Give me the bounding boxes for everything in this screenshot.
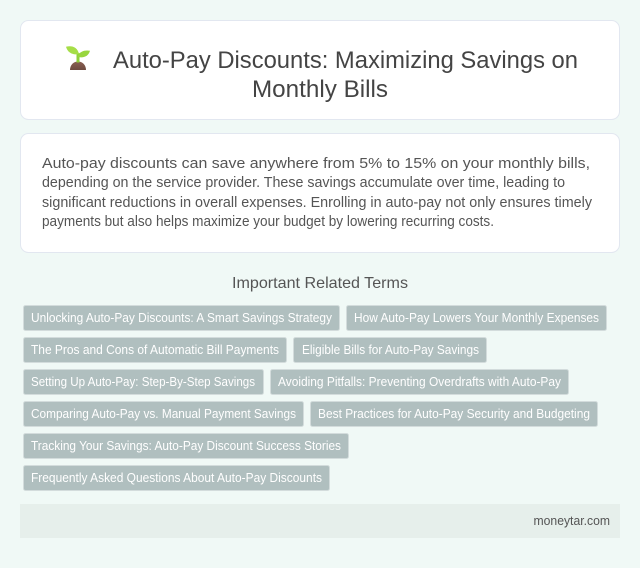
tag 3: The Pros and Cons of Automatic Bill Payments: [31, 343, 279, 357]
tag 4: [294, 338, 486, 362]
text block: description: significant reductions in overall expenses. Enrolling in auto-pay not only ensures timely: [42, 195, 593, 211]
title: Auto-Pay Discounts: Maximizing Savings on: [113, 47, 578, 74]
tag 4: Eligible Bills for Auto-Pay Savings: [302, 343, 479, 357]
tag 2: How Auto-Pay Lowers Your Monthly Expenses: [354, 311, 599, 325]
footer: [20, 504, 620, 538]
tag 10: Frequently Asked Questions About Auto-Pay Discounts: [31, 471, 322, 485]
icon: seedling: [66, 46, 90, 70]
title: Monthly Bills: [252, 76, 388, 103]
text block: description: depending on the service provider. These savings accumulate over time, leading to: [42, 175, 565, 191]
tag 2: [346, 306, 606, 330]
tag 3: [24, 338, 286, 362]
tag 6: Avoiding Pitfalls: Preventing Overdrafts with Auto-Pay: [278, 375, 562, 389]
panel: description card: [20, 134, 620, 252]
tag 6: [270, 370, 568, 394]
panel: related term tags: [24, 306, 606, 490]
tag 5: [24, 370, 264, 394]
tag 9: [24, 434, 348, 458]
tag 8: Best Practices for Auto-Pay Security and Budgeting: [318, 407, 590, 421]
tag 7: Comparing Auto-Pay vs. Manual Payment Savings: [31, 407, 296, 421]
heading: related terms: Important Related Terms: [232, 275, 408, 292]
tag 7: [24, 402, 304, 426]
tag 9: Tracking Your Savings: Auto-Pay Discount Success Stories: [31, 439, 341, 453]
tag 10: [24, 466, 330, 490]
tag 1: [24, 306, 340, 330]
text block: description: [42, 156, 593, 230]
tag 5: Setting Up Auto-Pay: Step-By-Step Savings: [31, 375, 255, 389]
title: [113, 47, 578, 103]
panel: title card: [20, 20, 620, 120]
tag 1: Unlocking Auto-Pay Discounts: A Smart Savings Strategy: [31, 311, 333, 325]
text block: description: payments but also helps maximize your budget by lowering recurring costs.: [42, 214, 494, 230]
tag 8: [310, 402, 598, 426]
footer: moneytar.com: [534, 514, 610, 528]
text block: description: Auto-pay discounts can save anywhere from 5% to 15% on your monthly bills,: [42, 156, 590, 172]
